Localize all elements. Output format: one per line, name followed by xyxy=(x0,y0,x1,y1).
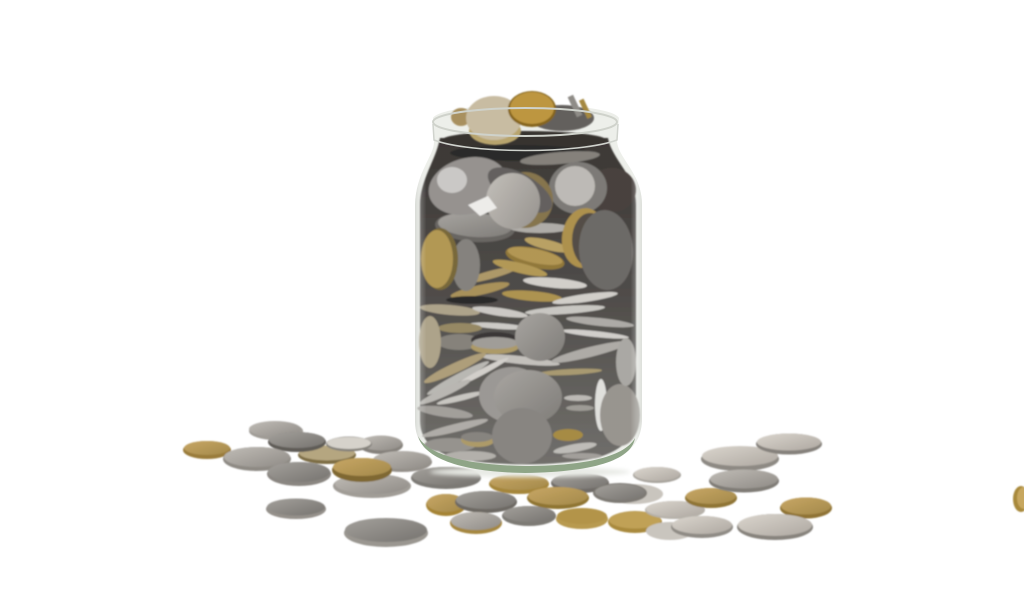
feature: big tilted coins right xyxy=(559,206,609,270)
glass jar filled with coins xyxy=(415,91,642,477)
coins overflowing at the top xyxy=(451,91,594,145)
glass highlights xyxy=(415,118,642,471)
jar rim xyxy=(433,108,618,150)
coin mass xyxy=(417,131,640,464)
feature: tilted coins upper xyxy=(588,168,636,212)
feature: coin on right bottom xyxy=(595,379,607,431)
green glass base xyxy=(418,436,635,473)
feature: coins on the left side xyxy=(452,239,480,291)
jar glass silhouette xyxy=(415,104,642,471)
stacked coins lower layer xyxy=(442,131,606,149)
coin pile left of jar xyxy=(183,421,481,547)
coin pile in front of jar xyxy=(426,467,737,540)
feature: lying coins middle xyxy=(504,242,566,274)
jar floor shadow xyxy=(430,467,630,477)
feature: silver coin centre xyxy=(515,313,565,361)
partial coin at right edge xyxy=(1013,486,1024,512)
feature: big coins bottom xyxy=(479,367,545,423)
coins right of jar xyxy=(701,434,832,540)
